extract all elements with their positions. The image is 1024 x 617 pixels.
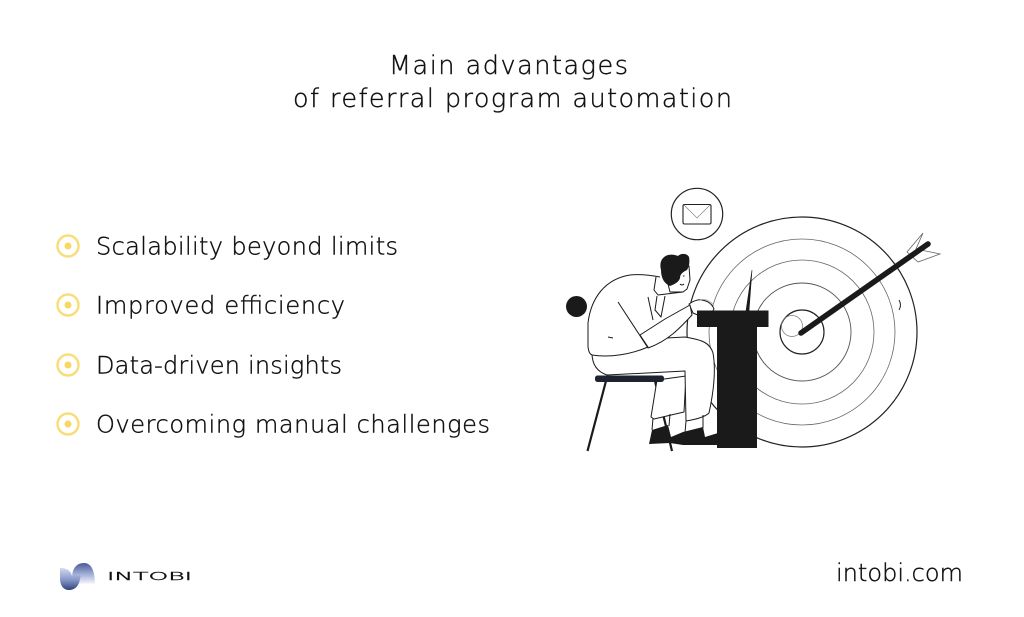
dark ball xyxy=(566,296,587,317)
person xyxy=(588,254,718,445)
tie and shirt xyxy=(648,296,665,320)
title: Main advantages xyxy=(389,51,628,81)
illustration: person aiming at target xyxy=(566,188,940,451)
list item: challenges: Overcoming manual challenges xyxy=(96,410,490,438)
icon: target xyxy=(687,217,917,447)
far leg xyxy=(651,376,686,419)
podium and laptop xyxy=(697,270,768,448)
website url: intobi.com xyxy=(836,559,963,587)
benefits list xyxy=(58,232,490,438)
stool seat xyxy=(595,376,664,382)
near leg and thigh xyxy=(592,337,714,421)
logo mark xyxy=(60,563,95,590)
face details xyxy=(680,276,684,285)
torso xyxy=(588,275,692,356)
list item: insights: Data-driven insights xyxy=(96,352,342,380)
list item: scalability: Scalability beyond limits xyxy=(96,232,398,260)
icon: envelope bubble xyxy=(671,188,723,240)
logo wordmark: INTOBI xyxy=(107,570,192,583)
list item: efficiency: Improved efficiency xyxy=(96,292,345,320)
title xyxy=(293,51,732,114)
title: of referral program automation xyxy=(293,84,732,114)
hair xyxy=(660,254,689,286)
stool xyxy=(588,381,672,451)
hand xyxy=(689,300,714,316)
face xyxy=(668,266,690,292)
logo: INTOBI xyxy=(60,563,192,590)
shoes xyxy=(649,425,718,445)
icon: arrow xyxy=(801,233,940,333)
